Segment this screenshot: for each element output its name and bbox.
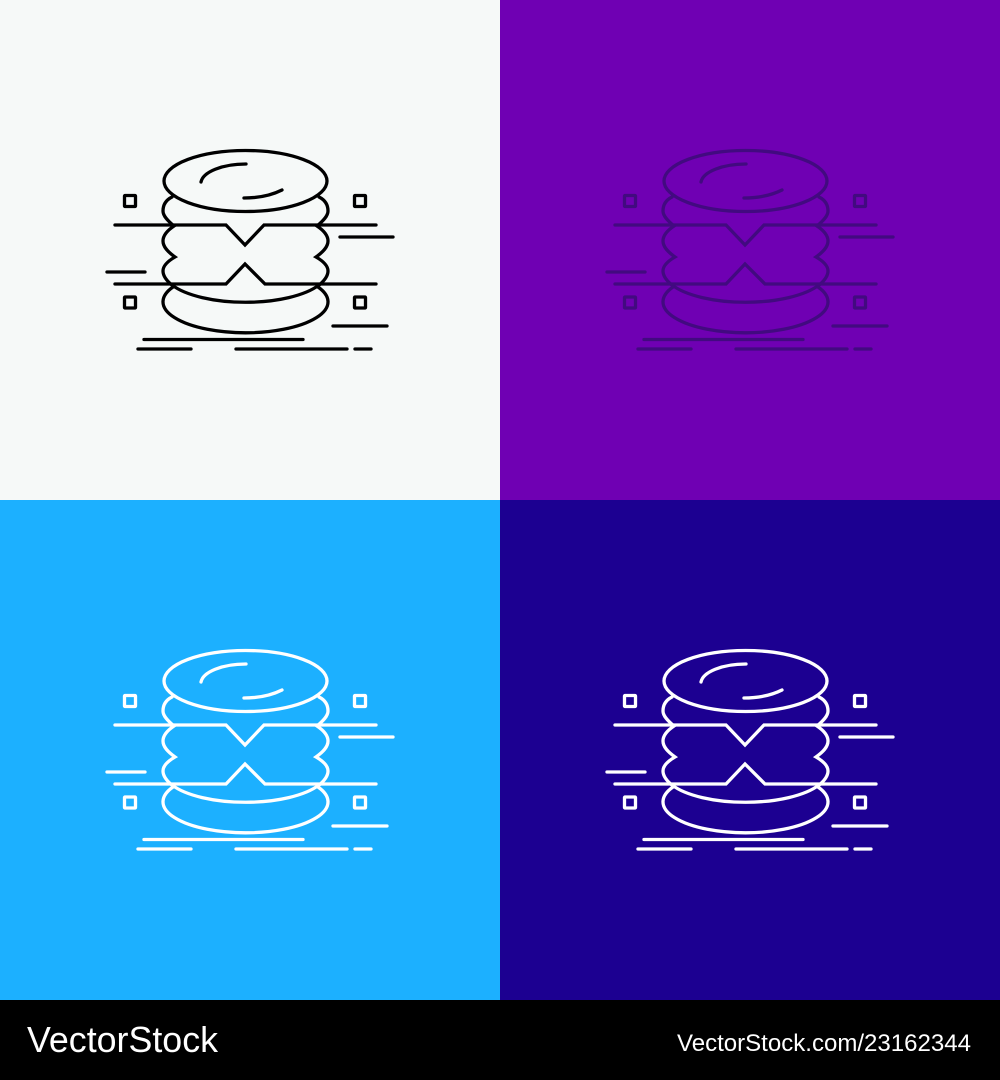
footer bar — [0, 1000, 1000, 1080]
panel: purple background — [500, 0, 1000, 500]
icon: white database on navy — [607, 650, 893, 849]
panel: navy background — [500, 500, 1000, 1000]
icon: dark database on purple — [607, 150, 893, 349]
icon: black database on white — [107, 150, 393, 349]
footer logo text: VectorStock — [27, 1019, 219, 1060]
panel: light blue background — [0, 500, 500, 1000]
panel: white background — [0, 0, 500, 500]
footer image id text: VectorStock.com/23162344 — [677, 1030, 971, 1057]
icon: white database on light blue — [107, 650, 393, 849]
